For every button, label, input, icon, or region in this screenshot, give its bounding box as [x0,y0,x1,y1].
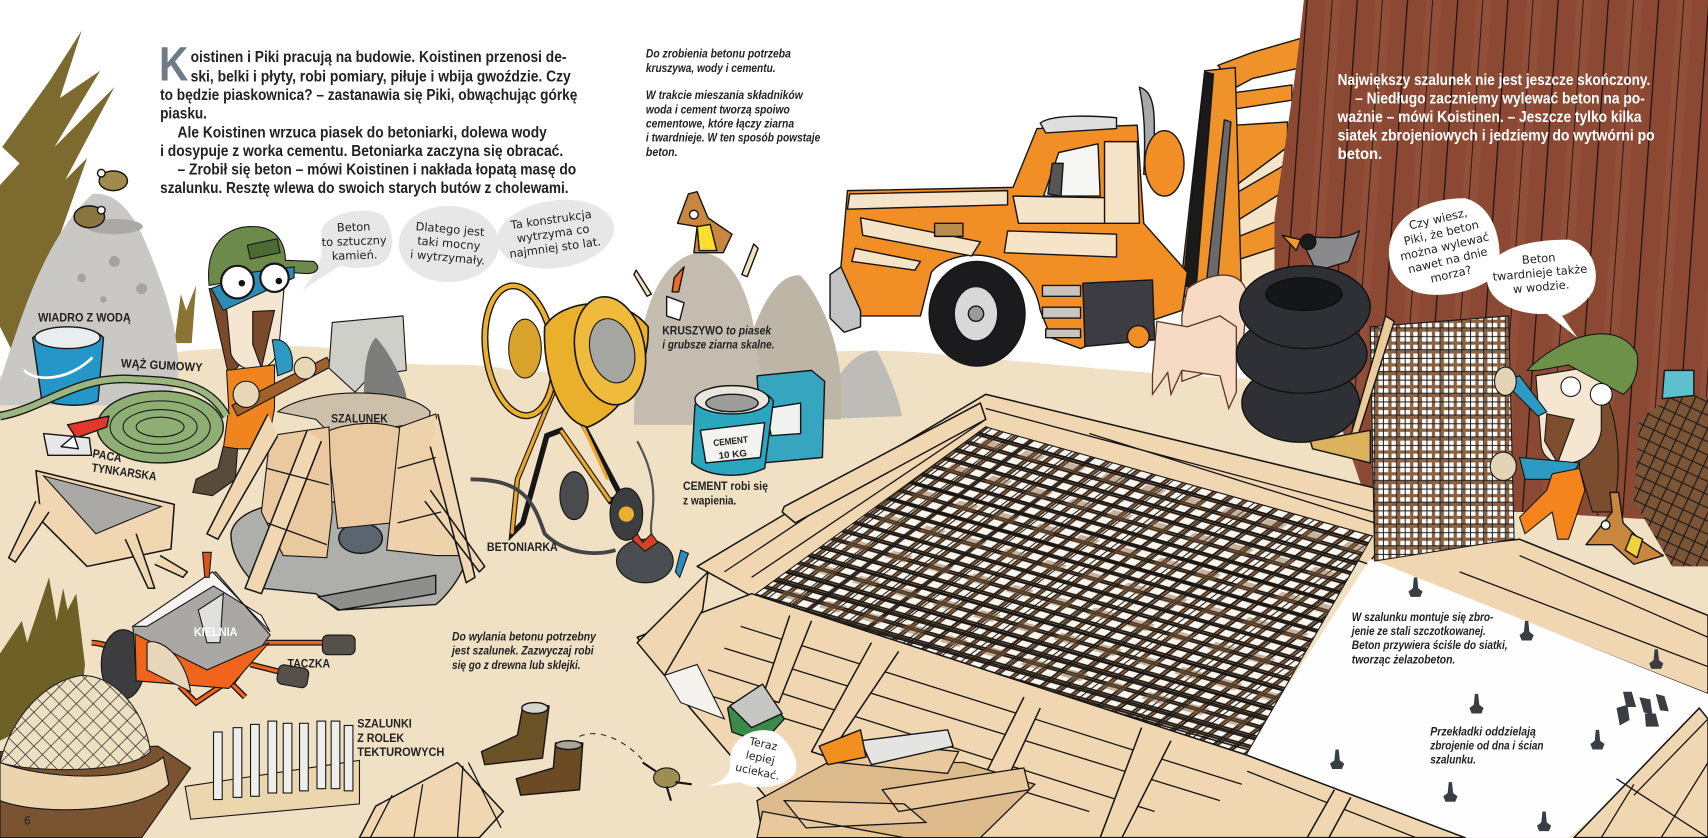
speech bubble: Beton to sztuczny kamień: to sztuczny [321,233,387,249]
speech bubble: Dlatego jest taki mocny: i wytrzymały. [410,247,486,268]
speech bubble: Teraz lepiej uciekać: Teraz [747,735,779,753]
side note: reinforcement: Beton przywiera ściśle do siatki, [1352,638,1508,652]
box of nails [728,684,784,743]
white text block on barn wall: – Niedługo zaczniemy wylewać beton na po- [1355,90,1645,107]
main text block: ski, belki i płyty, robi pomiary, piłuje i wbija gwoździe. Czy [191,69,571,86]
white text block on barn wall: Największy szalunek nie jest jeszcze skończony. [1338,72,1650,89]
main text block [159,39,578,197]
worker Koistinen with shovel [193,227,318,496]
small wooden mould [9,471,187,588]
speech bubble: Beton to sztuczny kamień: Beton [337,219,371,235]
speech bubble: Dlatego jest taki mocny: taki mocny [417,234,481,253]
label: cardboard moulds: TEKTUROWYCH [357,745,444,759]
speech bubble: Dlatego jest taki mocny: Dlatego jest [415,219,486,239]
side note: ingredients of concrete: kruszywa, wody i cementu. [646,61,776,75]
central formwork wooden sides [207,393,485,594]
side note: formwork: się go z drewna lub sklejki. [452,658,581,672]
crow on tyres [1282,231,1359,268]
side note: reinforcement: W szalunku montuje się zbro- [1352,610,1493,624]
label: aggregate: KRUSZYWO to piasek [662,323,772,337]
white text block on barn wall: siatek zbrojeniowych i jedziemy do wytwórni po [1338,128,1655,145]
side note: ingredients of concrete: i twardnieje. W ten sposób powstaje [646,131,821,145]
speech bubble: Czy wiesz: Piki, że beton [1402,217,1480,248]
label: cardboard moulds: Z ROLEK [357,731,404,745]
page number: 6 [24,814,31,828]
speech bubble: Beton twardnieje także: Beton [1521,250,1556,267]
side note: ingredients of concrete: cementowe, które łączy ziarna [646,116,794,130]
plastering float [44,416,109,455]
side note: formwork: Do wylania betonu potrzebny [452,630,597,644]
cardboard roll moulds [185,721,359,819]
side note: formwork [450,630,597,672]
white slab [1242,559,1708,838]
shovel with concrete [232,316,406,416]
white text block on barn wall: ważnie – mówi Koistinen. – Jeszcze tylko kilka [1337,109,1642,126]
main text block: piasku. [160,106,207,123]
central formwork concrete base [231,501,468,610]
side note: spacers [1429,724,1544,767]
small reed: behind worker [174,285,196,343]
worker Koistinen holding mesh [1490,334,1638,539]
white text block on barn wall: beton. [1338,146,1382,163]
speech bubble: Ta konstrukcja: wytrzyma co [516,221,590,246]
wood frame bottom right [1574,708,1708,838]
foam under front wood [664,664,724,719]
speech bubble: Beton twardnieje także [1487,240,1596,338]
sand ground [0,346,1708,838]
speech bubble: Teraz lepiej uciekać: lepiej [745,749,776,767]
side note: reinforcement: tworząc żelazobeton. [1352,652,1455,666]
big formwork: right wood side [1370,539,1708,694]
wooden offcuts pile [757,741,1035,838]
main text block: oistinen i Piki pracują na budowie. Koistinen przenosi de- [191,49,566,66]
label: aggregate [662,323,774,352]
side note: ingredients of concrete: Do zrobienia betonu potrzeba [646,47,791,61]
label: bucket: WIADRO Z WODĄ [38,310,131,324]
rubber boots [481,703,583,795]
side note: ingredients of concrete: woda i cement tworzą spoiwo [646,102,790,116]
small mould bottom [359,763,503,838]
label: hose: WĄŻ GUMOWY [121,355,203,374]
main text block: to będzie piaskownica? – zastanawia się Piki, obwąchując górkę [160,87,578,104]
side note: reinforcement: jenie ze stali szczotkowanej. [1350,624,1486,638]
big formwork: front wood side [637,403,1465,838]
side note: formwork: jest szalunek. Zazwyczaj robi [450,644,594,658]
white text block on barn wall [1337,72,1655,163]
reinforcement mesh [752,427,1372,755]
label: cement: CEMENT robi się [683,479,768,493]
small dog by formwork [1586,492,1663,564]
power cable and reel [471,441,688,583]
reed plant: upper left [0,31,114,349]
right-side rear mesh [1634,392,1708,566]
speech bubble: Ta konstrukcja: Ta konstrukcja [509,207,593,232]
speech bubble: Beton to sztuczny kamień: kamień. [332,247,378,263]
label: wheelbarrow: TACZKA [288,657,330,671]
rubber hose [0,379,227,463]
label: cardboard moulds [357,717,444,759]
drop cap K: K [159,39,189,92]
label: float second line: TYNKARSKA [91,461,158,484]
lower left reed [0,577,85,741]
formwork label: SZALUNEK [331,412,388,426]
hand saw [819,730,953,765]
label: trowel: KIELNIA [194,625,238,639]
side note: ingredients of concrete [646,47,821,159]
label: cardboard moulds: SZALUNKI [357,717,412,731]
speech bubble: Czy wiesz: morza? [1429,263,1473,286]
speech bubble: Beton twardnieje także: twardnieje także [1492,262,1588,284]
leaping frog with jump trail [580,734,692,801]
spacers on slab [1330,577,1669,831]
side note: spacers: zbrojenie od dna i ścian [1429,738,1544,752]
big formwork: back and left wood frame [697,394,1375,599]
side note: ingredients of concrete: beton. [646,145,678,159]
main text block: Ale Koistinen wrzuca piasek do betoniarki, dolewa wody [178,124,547,141]
speech bubble: Beton to sztuczny kamień [303,211,392,290]
rake [1310,316,1394,463]
side note: spacers: Przekładki oddzielają [1430,724,1536,738]
label: mixer: BETONIARKA [487,540,558,554]
dog on mound [678,192,732,253]
cement bags [692,370,825,475]
label: float: PACA [92,446,123,465]
frogs on mound [74,169,127,228]
blue mug [1662,370,1694,399]
side note: spacers: szalunku. [1430,753,1476,767]
label: cement: z wapienia. [683,493,736,507]
main text block: – Zrobił się beton – mówi Koistinen i nakłada łopatą masę do [178,161,577,178]
truck crane [1181,38,1302,316]
plastic chairs [1152,275,1247,408]
speech bubble: Teraz lepiej uciekać: uciekać. [734,761,781,783]
speech bubble: Ta konstrukcja [493,193,618,276]
speech bubble: Czy wiesz: Czy wiesz, [1408,205,1469,232]
tyre stack [1236,266,1370,442]
main text block: szalunku. Resztę wlewa do swoich starych butów z cholewami. [160,180,569,197]
barn wall [1274,0,1708,523]
truck wheel [929,261,1025,366]
concrete mixer [477,281,654,540]
wheelbarrow [92,552,355,703]
speech bubble: Czy wiesz: można wylewać [1399,229,1490,264]
rear mounds of aggregate [634,253,902,425]
net dome on brown board [0,675,191,838]
speech bubble: Teraz lepiej uciekać [706,730,796,787]
rock mound: left [0,194,178,405]
speech bubble: Czy wiesz [1389,198,1500,295]
cement bag weight: 10 KG [718,448,747,461]
side note: ingredients of concrete: W trakcie mieszania składników [646,88,803,102]
main text block: i dosypuje z worka cementu. Betoniarka zaczyna się obracać. [160,143,563,160]
cement bag labels: CEMENT [713,435,749,448]
speech bubble: Czy wiesz: nawet na dnie [1406,244,1489,276]
speech bubble: Dlatego jest taki mocny [399,206,499,282]
side note: reinforcement [1350,610,1508,666]
truck body [830,87,1187,349]
speech bubble: Beton twardnieje także: w wodzie. [1512,277,1570,296]
trowel and bones on mound [634,244,758,320]
speech bubble: Ta konstrukcja: najmniej sto lat. [508,234,602,261]
label: cement [683,479,768,507]
bucket with water [24,327,103,405]
standing mesh sheet [1370,316,1514,561]
label: aggregate: i grubsze ziarna skalne. [662,338,774,352]
